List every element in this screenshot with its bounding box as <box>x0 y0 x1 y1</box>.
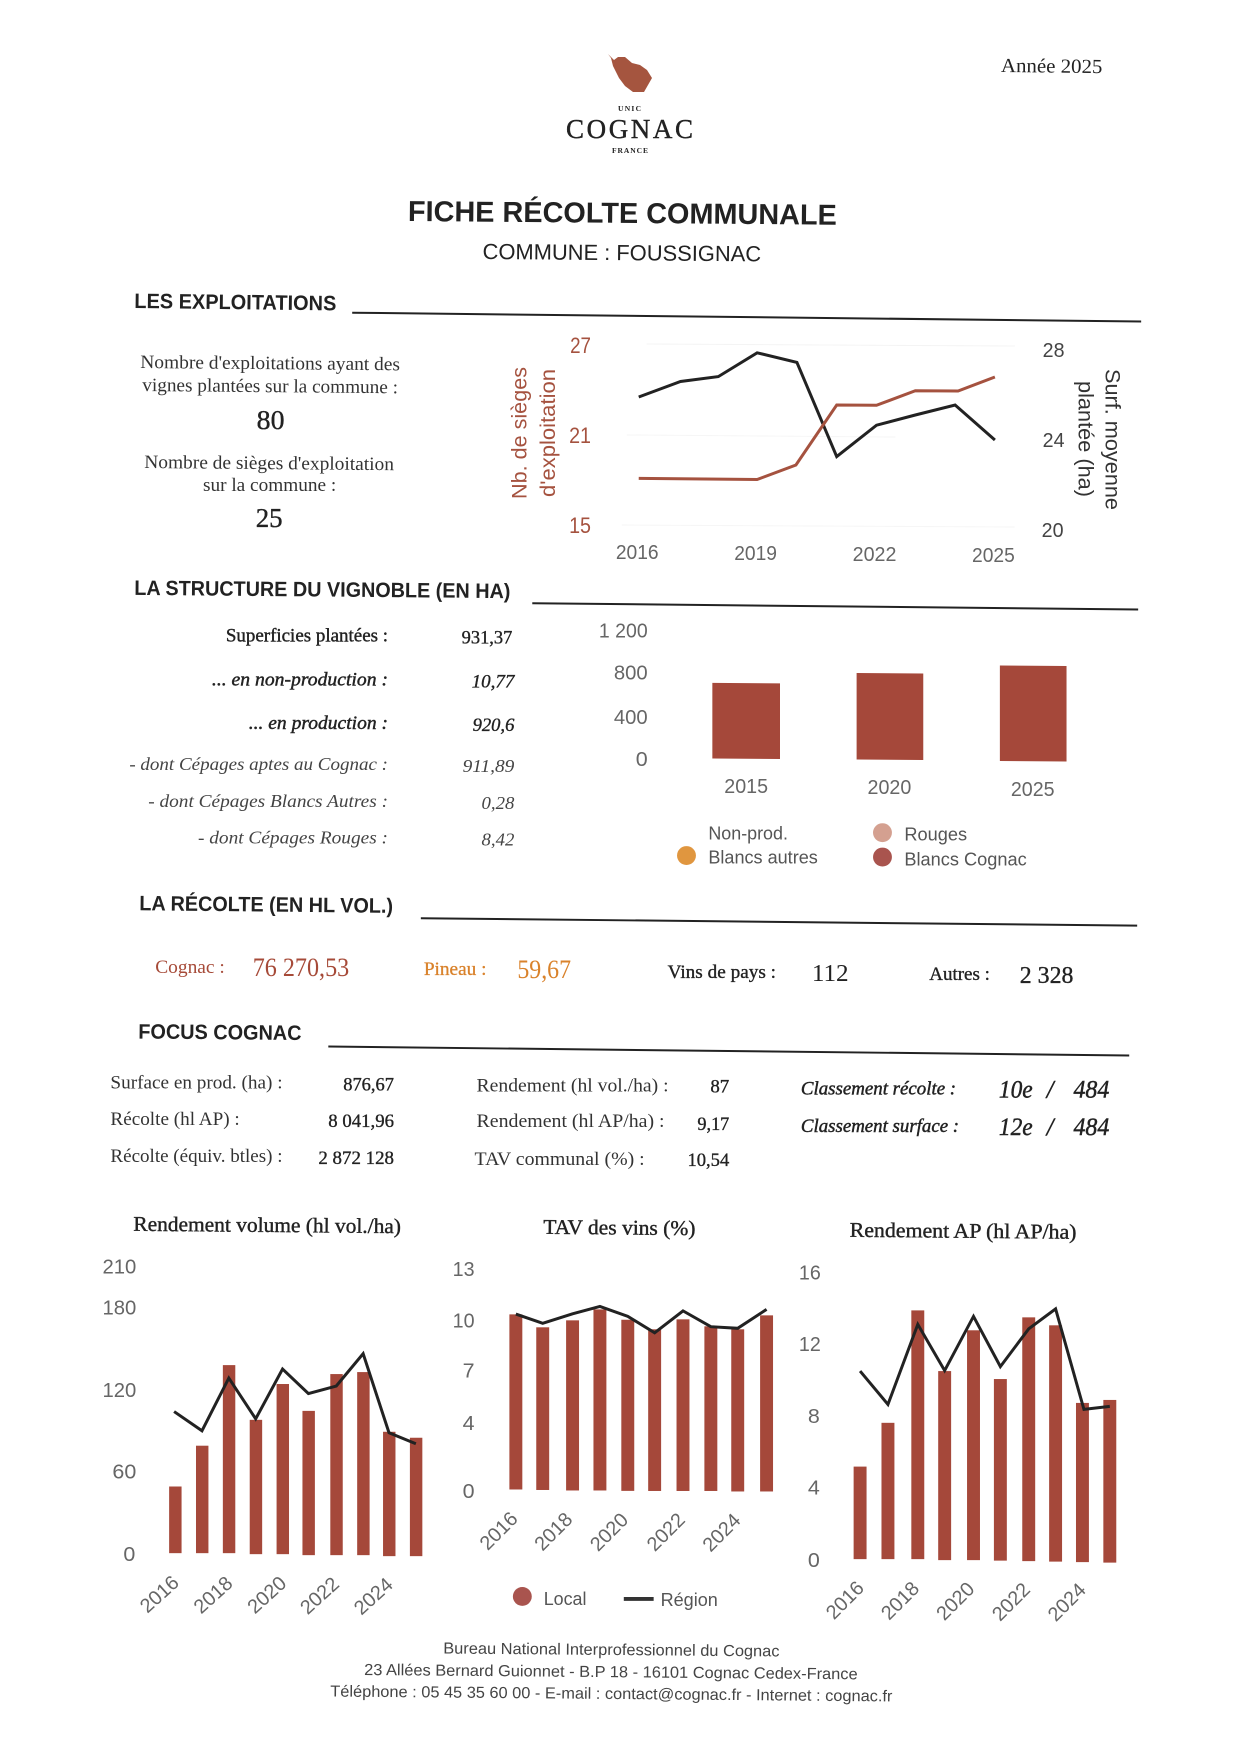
subtitle: commune: COMMUNE : FOUSSIGNAC <box>482 239 761 266</box>
chart: TAV des vins: 0 <box>463 1481 475 1503</box>
line chart: sièges and surface moyenne: 27 <box>570 333 591 358</box>
panel: focus cognac surfaces: 876,67 <box>343 1074 394 1095</box>
section heading: la récolte: LA RÉCOLTE (EN HL VOL.) <box>139 892 393 918</box>
panel: focus cognac rendements: Rendement (hl vol./ha) : <box>477 1075 669 1096</box>
panel: exploitation counts: vignes plantées sur la commune : <box>142 375 398 398</box>
panel: classements <box>801 1076 1109 1141</box>
chart: TAV des vins: 2024 <box>699 1510 745 1556</box>
panel: exploitation counts: Nombre d'exploitations ayant des <box>140 352 400 375</box>
bar chart: vignoble 2015 2020 2025: 800 <box>614 662 648 684</box>
section heading: structure du vignoble: LA STRUCTURE DU VIGNOBLE (EN HA) <box>134 577 511 603</box>
panel: surfaces table: 8,42 <box>482 830 514 850</box>
chart: rendement AP: 4 <box>808 1477 820 1499</box>
chart: rendement volume: 120 <box>102 1380 136 1402</box>
section heading: les exploitations <box>134 290 1141 322</box>
panel: classements: 484 <box>1073 1076 1109 1103</box>
panel: surfaces table: - dont Cépages Rouges : <box>198 828 388 848</box>
line chart: sièges and surface moyenne: 2016 <box>616 542 659 564</box>
chart: rendement volume <box>102 1212 422 1620</box>
panel: surfaces table: Superficies plantées : <box>226 626 388 647</box>
bar chart: vignoble 2015 2020 2025: 400 <box>614 707 648 729</box>
chart: TAV des vins <box>453 1215 773 1556</box>
legend: vignoble: Blancs autres <box>708 847 818 868</box>
bar chart: vignoble 2015 2020 2025: 1 200 <box>599 621 648 643</box>
chart: rendement AP: Rendement AP (hl AP/ha) <box>850 1218 1077 1244</box>
chart: TAV des vins: 10 <box>453 1310 475 1332</box>
panel: surfaces table: - dont Cépages Blancs Autres : <box>148 791 388 811</box>
chart: rendement volume: 2024 <box>350 1574 398 1620</box>
panel: harvest volumes: Autres : <box>929 964 990 985</box>
bar chart: vignoble 2015 2020 2025: 0 <box>636 749 648 771</box>
logo: UNIC Cognac France: UNIC <box>618 104 641 113</box>
section heading: la récolte <box>139 892 1137 926</box>
chart: rendement volume: 0 <box>123 1544 135 1566</box>
footer: contact details: Bureau National Interprofessionnel du Cognac <box>443 1640 780 1660</box>
panel: exploitation counts: 25 <box>256 503 283 533</box>
line chart: sièges and surface moyenne: plantée (ha) <box>1073 381 1096 497</box>
panel: focus cognac rendements: TAV communal (%) : <box>475 1149 645 1170</box>
panel: harvest volumes: Vins de pays : <box>668 962 776 983</box>
panel: harvest volumes: Cognac : <box>155 957 225 978</box>
section heading: structure du vignoble <box>134 577 1138 609</box>
chart: rendement volume: 60 <box>112 1462 136 1484</box>
panel: exploitation counts <box>140 352 400 533</box>
chart: rendement volume: 2020 <box>243 1572 291 1618</box>
bar chart: vignoble 2015 2020 2025: 2020 <box>868 777 911 799</box>
line chart: sièges and surface moyenne <box>508 333 1123 567</box>
year label: Année 2025 <box>1001 55 1103 78</box>
panel: surfaces table: - dont Cépages aptes au Cognac : <box>129 754 388 774</box>
line chart: sièges and surface moyenne: Nb. de sièges <box>508 367 531 499</box>
logo: UNIC Cognac France: COGNAC <box>566 114 693 144</box>
title: FICHE RÉCOLTE COMMUNALE <box>408 194 837 232</box>
panel: classements: Classement surface : <box>801 1116 959 1137</box>
footer: contact details <box>330 1640 893 1705</box>
footer: contact details: Téléphone : 05 45 35 60 00 - E-mail : contact@cognac.fr - Internet : cognac.fr <box>330 1683 893 1705</box>
legend: local and région: Local <box>544 1589 586 1610</box>
panel: surfaces table: ... en production : <box>249 713 388 734</box>
panel: exploitation counts: Nombre de sièges d'exploitation <box>144 452 395 475</box>
panel: classements: Classement récolte : <box>801 1078 956 1099</box>
chart: rendement AP: 2022 <box>988 1579 1035 1626</box>
chart: rendement AP: 0 <box>808 1550 820 1572</box>
line chart: sièges and surface moyenne: 2025 <box>972 545 1015 567</box>
panel: focus cognac surfaces: 2 872 128 <box>318 1148 394 1169</box>
chart: TAV des vins: TAV des vins (%) <box>543 1215 696 1240</box>
panel: focus cognac surfaces: 8 041,96 <box>328 1111 394 1132</box>
logo: UNIC Cognac France: FRANCE <box>612 146 648 155</box>
chart: rendement AP <box>799 1218 1116 1626</box>
panel: focus cognac rendements <box>475 1075 730 1171</box>
legend: local and région <box>513 1587 718 1611</box>
panel: classements: / <box>1045 1076 1056 1103</box>
icon: Cognac region map <box>608 54 652 92</box>
chart: TAV des vins: 13 <box>453 1259 475 1281</box>
chart: rendement AP: 2024 <box>1044 1579 1091 1626</box>
panel: focus cognac rendements: 9,17 <box>697 1114 729 1135</box>
chart: rendement volume: 2022 <box>296 1573 344 1619</box>
panel: focus cognac surfaces <box>110 1072 394 1169</box>
line chart: sièges and surface moyenne: 15 <box>569 513 591 538</box>
panel: harvest volumes: Pineau : <box>424 959 487 980</box>
panel: harvest volumes: 59,67 <box>517 955 571 984</box>
bar chart: vignoble 2015 2020 2025: 2015 <box>724 776 768 798</box>
section heading: focus cognac: FOCUS COGNAC <box>138 1021 302 1045</box>
chart: rendement volume: 180 <box>102 1297 136 1319</box>
panel: harvest volumes: 76 270,53 <box>253 953 349 982</box>
panel: surfaces table: 911,89 <box>463 756 514 776</box>
line chart: sièges and surface moyenne: Surf. moyenne <box>1100 369 1123 510</box>
panel: harvest volumes: 112 <box>812 961 849 987</box>
footer: contact details: 23 Allées Bernard Guionnet - B.P 18 - 16101 Cognac Cedex-France <box>364 1662 858 1683</box>
chart: TAV des vins: 2020 <box>586 1509 633 1556</box>
line chart: sièges and surface moyenne: d'exploitation <box>537 369 560 497</box>
panel: focus cognac rendements: 10,54 <box>687 1150 730 1171</box>
chart: TAV des vins: 4 <box>463 1413 475 1435</box>
chart: rendement AP: 2020 <box>932 1578 979 1625</box>
panel: surfaces table: 931,37 <box>462 628 512 649</box>
chart: rendement volume: 210 <box>102 1257 136 1279</box>
section heading: les exploitations: LES EXPLOITATIONS <box>134 290 337 315</box>
panel: surfaces table: 920,6 <box>473 715 515 736</box>
chart: TAV des vins: 7 <box>463 1361 475 1383</box>
logo: UNIC Cognac France <box>566 54 693 155</box>
panel: classements: 10e <box>999 1076 1033 1103</box>
legend: vignoble: Non-prod. <box>708 824 788 845</box>
panel: focus cognac surfaces: Surface en prod. (ha) : <box>110 1072 283 1093</box>
chart: rendement volume: Rendement volume (hl vol./ha) <box>133 1212 401 1238</box>
line chart: sièges and surface moyenne: 21 <box>569 423 591 448</box>
bar chart: vignoble 2015 2020 2025 <box>599 621 1067 801</box>
line chart: sièges and surface moyenne: 24 <box>1043 430 1065 452</box>
panel: focus cognac rendements: 87 <box>710 1076 729 1097</box>
chart: TAV des vins: 2018 <box>530 1509 577 1555</box>
legend: vignoble: Blancs Cognac <box>904 849 1027 870</box>
chart: rendement volume: 2016 <box>136 1572 184 1618</box>
panel: focus cognac surfaces: Récolte (équiv. btles) : <box>110 1146 283 1167</box>
panel: harvest volumes: 2 328 <box>1020 963 1074 989</box>
chart: rendement AP: 2016 <box>822 1577 869 1624</box>
panel: surfaces table: 0,28 <box>482 793 514 813</box>
line chart: sièges and surface moyenne: 20 <box>1042 520 1064 542</box>
panel: surfaces table: 10,77 <box>472 671 516 692</box>
panel: surfaces table <box>129 626 516 850</box>
chart: rendement AP: 2018 <box>877 1578 924 1625</box>
panel: classements: / <box>1045 1114 1056 1141</box>
panel: surfaces table: ... en non-production : <box>212 669 388 690</box>
panel: classements: 484 <box>1073 1114 1109 1141</box>
legend: vignoble: Rouges <box>904 825 967 846</box>
section heading: focus cognac <box>138 1021 1129 1055</box>
panel: focus cognac surfaces: Récolte (hl AP) : <box>110 1109 240 1130</box>
panel: exploitation counts: sur la commune : <box>203 475 336 496</box>
chart: rendement AP: 12 <box>799 1334 821 1356</box>
bar chart: vignoble 2015 2020 2025: 2025 <box>1011 779 1055 801</box>
line chart: sièges and surface moyenne: 28 <box>1043 340 1065 362</box>
chart: rendement volume: 2018 <box>190 1572 237 1618</box>
panel: classements: 12e <box>999 1114 1033 1141</box>
panel: focus cognac rendements: Rendement (hl AP/ha) : <box>477 1111 665 1132</box>
line chart: sièges and surface moyenne: 2022 <box>853 544 896 566</box>
panel: harvest volumes <box>155 953 1074 989</box>
legend: local and région: Région <box>661 1590 718 1611</box>
line chart: sièges and surface moyenne: 2019 <box>734 543 777 565</box>
chart: TAV des vins: 2016 <box>476 1508 523 1555</box>
chart: TAV des vins: 2022 <box>643 1509 690 1556</box>
legend: vignoble <box>677 823 1027 870</box>
panel: exploitation counts: 80 <box>257 405 285 435</box>
chart: rendement AP: 8 <box>808 1406 820 1428</box>
chart: rendement AP: 16 <box>799 1263 821 1285</box>
